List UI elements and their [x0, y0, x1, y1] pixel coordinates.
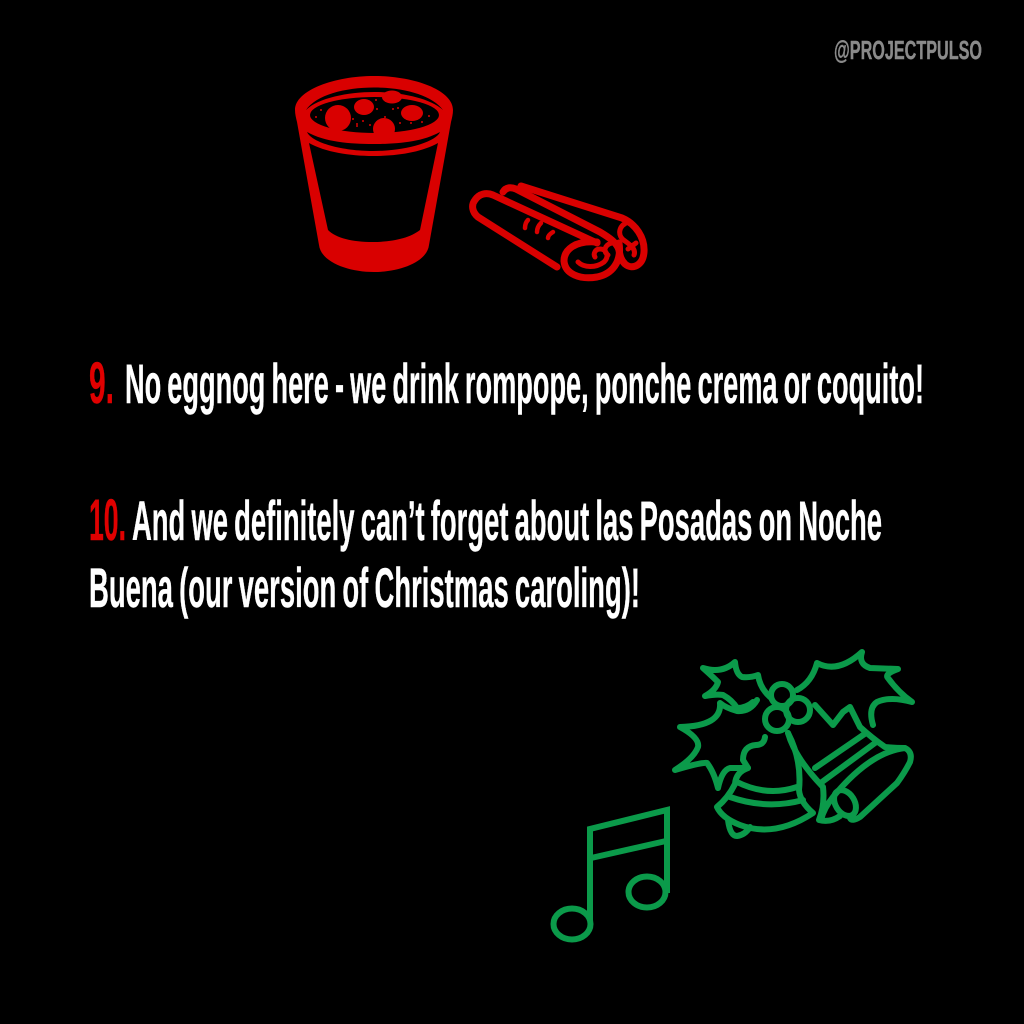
item 10 text	[89, 488, 882, 619]
holly leaf: top right	[797, 652, 912, 725]
icon: cup of rompope	[295, 76, 453, 272]
left bell	[717, 733, 813, 836]
icon: music notes	[554, 810, 667, 940]
item 10 text: 10.	[89, 488, 126, 553]
holly berries	[771, 684, 793, 706]
holly leaf: top left	[703, 662, 770, 708]
icon: holly and bells	[675, 652, 912, 836]
item 9 text: 9.	[89, 351, 114, 416]
right bell	[788, 705, 911, 821]
icon: cinnamon sticks	[473, 186, 644, 278]
holly leaf: left	[675, 700, 757, 788]
